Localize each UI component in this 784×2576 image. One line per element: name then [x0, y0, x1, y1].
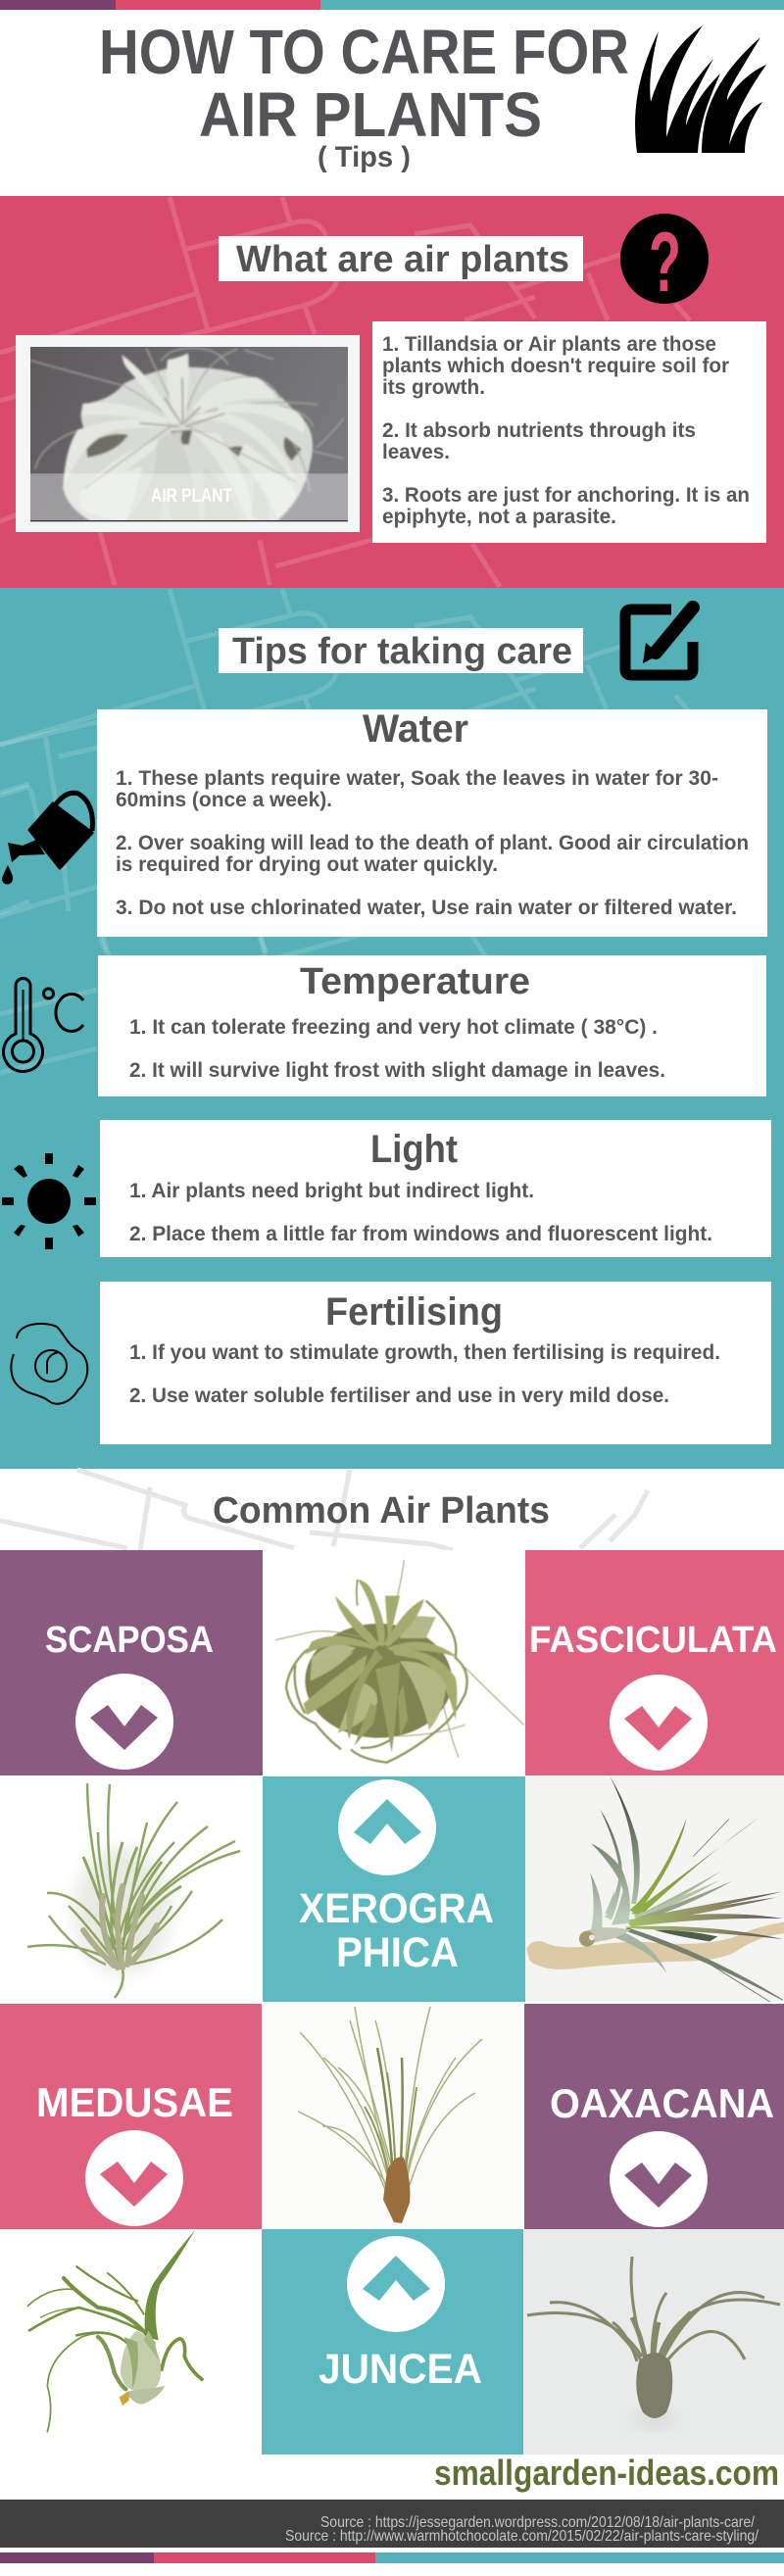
card: water: 60mins (once a week). — [116, 789, 332, 811]
card: temperature: 1. It can tolerate freezing and very hot climate ( 38°C) . — [129, 1016, 658, 1039]
tile: oaxacana: OAXACANA — [550, 2080, 774, 2126]
card: light: Light — [370, 1128, 458, 1171]
icon: question mark: ? — [649, 216, 681, 310]
card: water: 2. Over soaking will lead to the death of plant. Good air circulation — [116, 832, 749, 854]
card: water: 3. Do not use chlorinated water, Use rain water or filtered water. — [116, 897, 737, 919]
icon: pencil on notepad — [625, 608, 693, 675]
card: light: 2. Place them a little far from windows and fluorescent light. — [129, 1223, 712, 1245]
panel: what are air plants — [0, 196, 784, 588]
text block: definition — [372, 321, 766, 543]
card: water: 1. These plants require water, Soak the leaves in water for 30- — [116, 767, 718, 790]
panel: tips for taking care — [0, 588, 784, 1469]
card: water — [97, 707, 767, 937]
photo: scaposa plant — [263, 1550, 525, 1775]
tile: xerographica — [263, 1776, 525, 2002]
card: water: is required for drying out water quickly. — [116, 853, 498, 876]
tile: scaposa — [0, 1550, 263, 1775]
card: fertilising: Fertilising — [325, 1290, 503, 1334]
text block: definition: leaves. — [382, 441, 450, 463]
title: HOW TO CARE FOR — [99, 17, 629, 87]
tile: fasciculata: FASCICULATA — [529, 1620, 777, 1661]
card: light: 1. Air plants need bright but indirect light. — [129, 1180, 534, 1202]
text block: definition: 3. Roots are just for anchoring. It is an — [382, 484, 750, 507]
title: ( Tips ) — [318, 141, 411, 173]
tile: medusae: MEDUSAE — [36, 2079, 233, 2125]
tile: xerographica: XEROGRA — [299, 1885, 494, 1932]
card: water: Water — [363, 707, 468, 751]
tile: juncea — [262, 2229, 523, 2454]
title: AIR PLANTS — [199, 79, 542, 150]
title — [99, 17, 629, 173]
panel: common air plants — [0, 1470, 784, 2493]
card: temperature: 2. It will survive light frost with slight damage in leaves. — [129, 1059, 665, 1082]
card: temperature — [98, 955, 766, 1096]
text block: definition: 2. It absorb nutrients through its — [382, 419, 696, 442]
tile: juncea: JUNCEA — [318, 2346, 482, 2393]
icon: grass — [635, 25, 766, 153]
text block: definition: epiphyte, not a parasite. — [382, 506, 616, 528]
card: temperature: Temperature — [300, 961, 530, 1002]
top colour bar — [0, 0, 784, 10]
photo: air plant — [16, 335, 360, 532]
photo caption: AIR PLANT — [151, 486, 232, 507]
heading: tips for taking care: Tips for taking care — [232, 631, 572, 672]
card: fertilising — [100, 1282, 771, 1444]
text block: definition: plants which doesn't require soil for — [382, 355, 729, 377]
tile: medusae — [0, 2004, 262, 2229]
photo: thin-leaved plant — [262, 2003, 524, 2229]
text block: definition: 1. Tillandsia or Air plants are those — [382, 333, 716, 356]
tile: scaposa: SCAPOSA — [45, 1620, 214, 1661]
icon: watering can — [2, 793, 92, 884]
card: fertilising: 2. Use water soluble fertiliser and use in very mild dose. — [129, 1385, 669, 1407]
heading: what are air plants: What are air plants — [236, 239, 569, 280]
photo: second plant — [27, 1783, 240, 1998]
icon: fertiliser — [11, 1324, 87, 1404]
icon: question mark — [620, 214, 709, 310]
heading: common air plants: Common Air Plants — [213, 1490, 550, 1531]
photo: grey-green plant — [523, 2229, 784, 2454]
tile: fasciculata — [525, 1550, 784, 1775]
card: light — [100, 1120, 771, 1257]
bottom colour bar — [0, 2552, 784, 2563]
footer: sources — [0, 2500, 784, 2548]
icon: thermometer — [4, 979, 83, 1072]
photo: curly plant — [27, 2230, 202, 2432]
tile: xerographica: PHICA — [336, 1929, 459, 1976]
tile: oaxacana — [524, 2004, 784, 2229]
text block: definition: its growth. — [382, 376, 485, 399]
card: fertilising: 1. If you want to stimulate growth, then fertilising is required. — [129, 1341, 720, 1364]
photo: plant on driftwood — [525, 1776, 784, 2002]
icon: sun — [2, 1153, 96, 1249]
